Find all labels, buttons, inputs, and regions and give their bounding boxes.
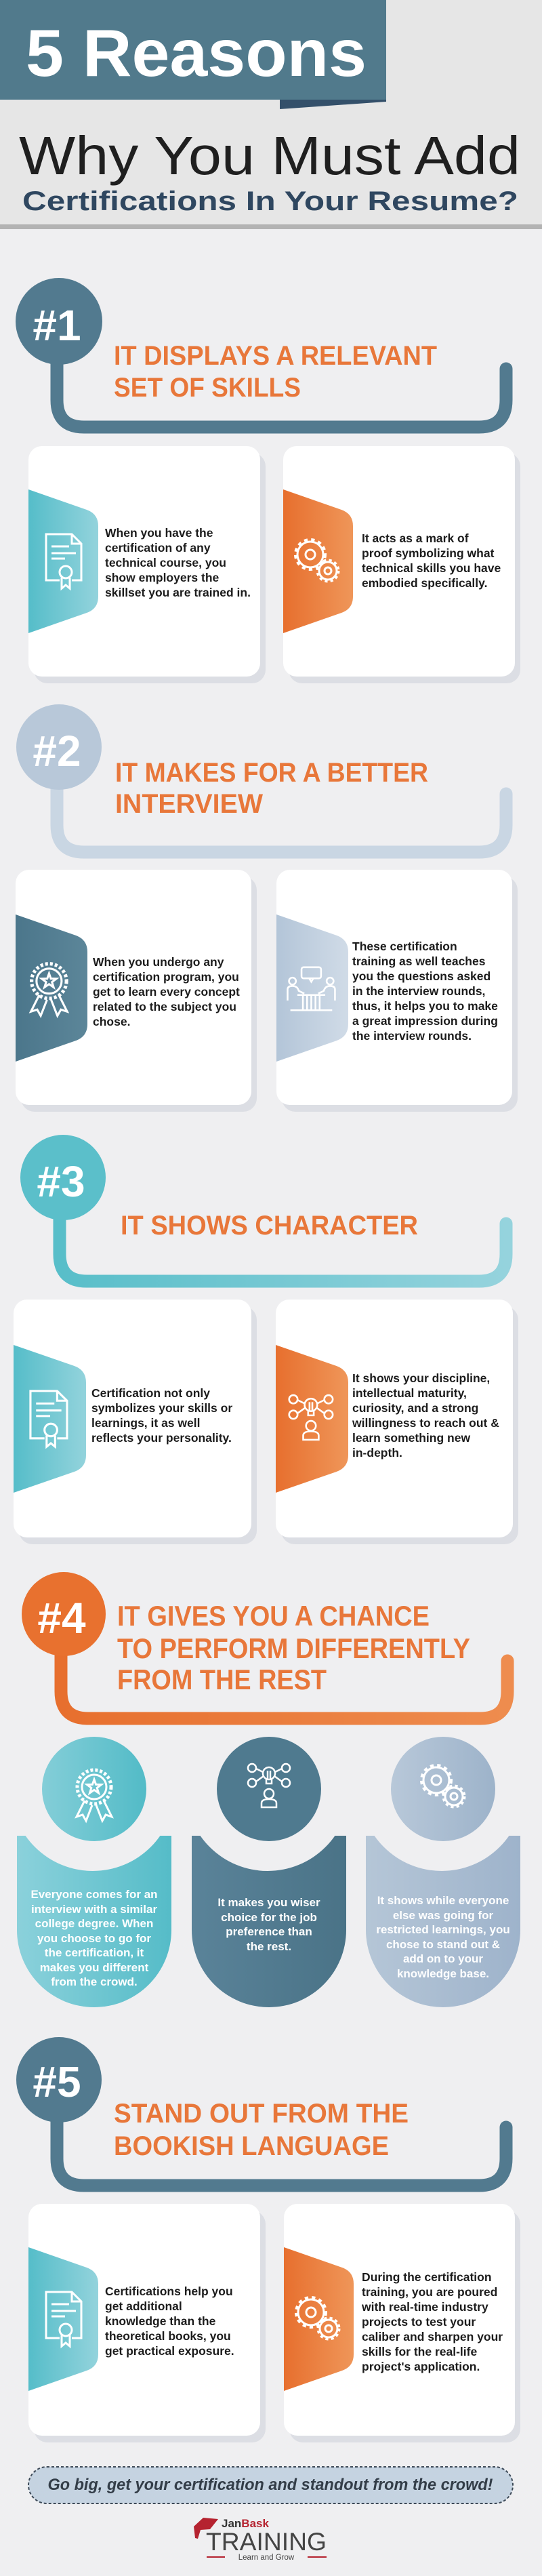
text: skillset you are trained in.	[105, 586, 251, 599]
text: choice for the job	[221, 1910, 317, 1924]
text: During the certification	[362, 2270, 492, 2284]
shape background	[17, 1836, 171, 2007]
text: curiosity, and a strong	[352, 1401, 478, 1415]
text: Certifications help you	[105, 2285, 233, 2298]
text: related to the subject you	[93, 1000, 236, 1013]
section 4 header: IT GIVES YOU A CHANCE	[117, 1600, 430, 1632]
text: get additional	[105, 2299, 182, 2313]
tab: certificate icon	[14, 1345, 86, 1493]
logo: JanBask Training: JanBask	[222, 2517, 269, 2530]
card 2 left	[16, 870, 251, 1105]
shape background	[366, 1836, 520, 2007]
text	[105, 2285, 234, 2358]
text: you choose to go for	[37, 1932, 151, 1944]
text	[105, 526, 251, 599]
text: These certification	[352, 940, 457, 953]
text: training as well teaches	[352, 954, 485, 968]
text: get to learn every concept	[93, 985, 240, 999]
section 4 header: #4	[37, 1594, 86, 1643]
text: in-depth.	[352, 1446, 402, 1460]
text	[362, 531, 501, 590]
text: It shows your discipline,	[352, 1371, 490, 1385]
text: college degree. When	[35, 1917, 153, 1930]
text: chose.	[93, 1015, 130, 1028]
tab: interview meeting icon	[276, 914, 348, 1062]
text: the interview rounds.	[352, 1029, 472, 1043]
text: technical skills you have	[362, 561, 501, 575]
tab: certificate icon	[28, 489, 98, 633]
text: else was going for	[393, 1909, 493, 1921]
section 4 column 2	[192, 1737, 346, 2007]
section 3 header	[20, 1135, 506, 1281]
text: preference than	[226, 1925, 312, 1938]
text	[217, 1896, 320, 1952]
text: show employers the	[105, 571, 219, 584]
subtitle line 1: Why You Must Add	[19, 125, 520, 186]
tab: certificate icon	[28, 2247, 98, 2391]
icon circle: idea network	[217, 1737, 321, 1841]
text: learn something new	[352, 1431, 470, 1445]
card 1 left	[28, 446, 260, 677]
footer callout: Go big, get your certification and standout from the crowd!	[47, 2476, 493, 2494]
title banner: 5 Reasons: 5 Reasons	[26, 16, 367, 90]
header background	[0, 0, 542, 229]
text: from the crowd.	[51, 1975, 138, 1988]
text: knowledge than the	[105, 2314, 215, 2328]
card 3 left	[14, 1300, 251, 1537]
tab: gears icon	[283, 489, 353, 633]
text: skills for the real-life	[362, 2345, 477, 2358]
section 1 header: IT DISPLAYS A RELEVANT	[114, 341, 437, 371]
section 3 header: IT SHOWS CHARACTER	[121, 1211, 418, 1241]
section 4 column 3	[366, 1737, 520, 2007]
text	[362, 2270, 503, 2373]
tab: idea network icon	[276, 1345, 348, 1493]
text	[30, 1888, 158, 1988]
section 2 header: IT MAKES FOR A BETTER	[115, 758, 428, 788]
text: training, you are poured	[362, 2285, 497, 2299]
text: When you have the	[105, 526, 213, 540]
section 4 header: TO PERFORM DIFFERENTLY	[117, 1632, 470, 1664]
section 5 header: STAND OUT FROM THE	[114, 2099, 409, 2129]
section 1 header: SET OF SKILLS	[114, 373, 301, 403]
text: knowledge base.	[397, 1967, 489, 1979]
section 5 header: #5	[33, 2057, 81, 2106]
text	[93, 955, 240, 1028]
section 4 header	[22, 1572, 507, 1718]
text: It acts as a mark of	[362, 531, 469, 545]
text: theoretical books, you	[105, 2329, 231, 2343]
section 1 header: #1	[33, 301, 81, 350]
icon circle: gears	[391, 1737, 495, 1841]
subtitle line 2: Certifications In Your Resume?	[22, 186, 518, 216]
text: the certification, it	[45, 1946, 144, 1959]
card 5 left	[28, 2204, 260, 2436]
card 2 right	[276, 870, 512, 1105]
section 1 header	[16, 278, 506, 427]
text: the rest.	[247, 1940, 291, 1952]
section 5 header	[16, 2037, 506, 2186]
text: certification program, you	[93, 970, 239, 984]
text: caliber and sharpen your	[362, 2330, 503, 2343]
text	[352, 940, 498, 1043]
text: in the interview rounds,	[352, 984, 485, 998]
card 3 right	[276, 1300, 513, 1537]
text: embodied specifically.	[362, 576, 487, 590]
text: Certification not only	[91, 1386, 210, 1400]
text: thus, it helps you to make	[352, 999, 498, 1013]
text: It makes you wiser	[217, 1896, 320, 1909]
text: project's application.	[362, 2360, 480, 2373]
card 1 right	[283, 446, 515, 677]
section 4 column 1	[17, 1737, 171, 2007]
section 4 header: FROM THE REST	[117, 1664, 327, 1695]
logo: JanBask Training: TRAINING	[206, 2528, 327, 2556]
text: It shows while everyone	[377, 1894, 509, 1907]
section 3 header: #3	[37, 1157, 85, 1206]
tab: gears icon	[284, 2247, 354, 2391]
icon circle: award	[42, 1737, 146, 1841]
text: learnings, it as well	[91, 1416, 200, 1430]
text: proof symbolizing what	[362, 546, 494, 560]
text: with real-time industry	[362, 2300, 488, 2314]
text: you the questions asked	[352, 969, 491, 983]
section 2 header: #2	[33, 727, 81, 776]
text: add on to your	[403, 1952, 483, 1965]
text: intellectual maturity,	[352, 1386, 467, 1400]
text: technical course, you	[105, 556, 226, 569]
text: When you undergo any	[93, 955, 224, 969]
section 2 header	[16, 704, 506, 852]
text	[352, 1371, 499, 1460]
tab: award icon	[16, 914, 87, 1062]
text	[91, 1386, 232, 1445]
text: a great impression during	[352, 1014, 498, 1028]
text: reflects your personality.	[91, 1431, 232, 1445]
text: restricted learnings, you	[376, 1923, 510, 1936]
text: chose to stand out &	[386, 1937, 500, 1951]
logo: JanBask Training: Learn and Grow	[238, 2554, 295, 2562]
section 5 header: BOOKISH LANGUAGE	[114, 2131, 389, 2161]
text: Everyone comes for an	[30, 1888, 158, 1901]
shape background	[192, 1836, 346, 2007]
text: interview with a similar	[31, 1902, 157, 1916]
text: symbolizes your skills or	[91, 1401, 232, 1415]
text: willingness to reach out &	[352, 1416, 499, 1430]
text: makes you different	[40, 1960, 148, 1974]
text: projects to test your	[362, 2315, 476, 2329]
logo: JanBask Training	[194, 2517, 327, 2562]
text: certification of any	[105, 541, 211, 555]
card 5 right	[284, 2204, 515, 2436]
text	[376, 1894, 510, 1979]
text: get practical exposure.	[105, 2344, 234, 2358]
section 2 header: INTERVIEW	[115, 789, 263, 819]
title banner: 5 Reasons	[0, 0, 386, 109]
footer callout	[28, 2467, 513, 2503]
